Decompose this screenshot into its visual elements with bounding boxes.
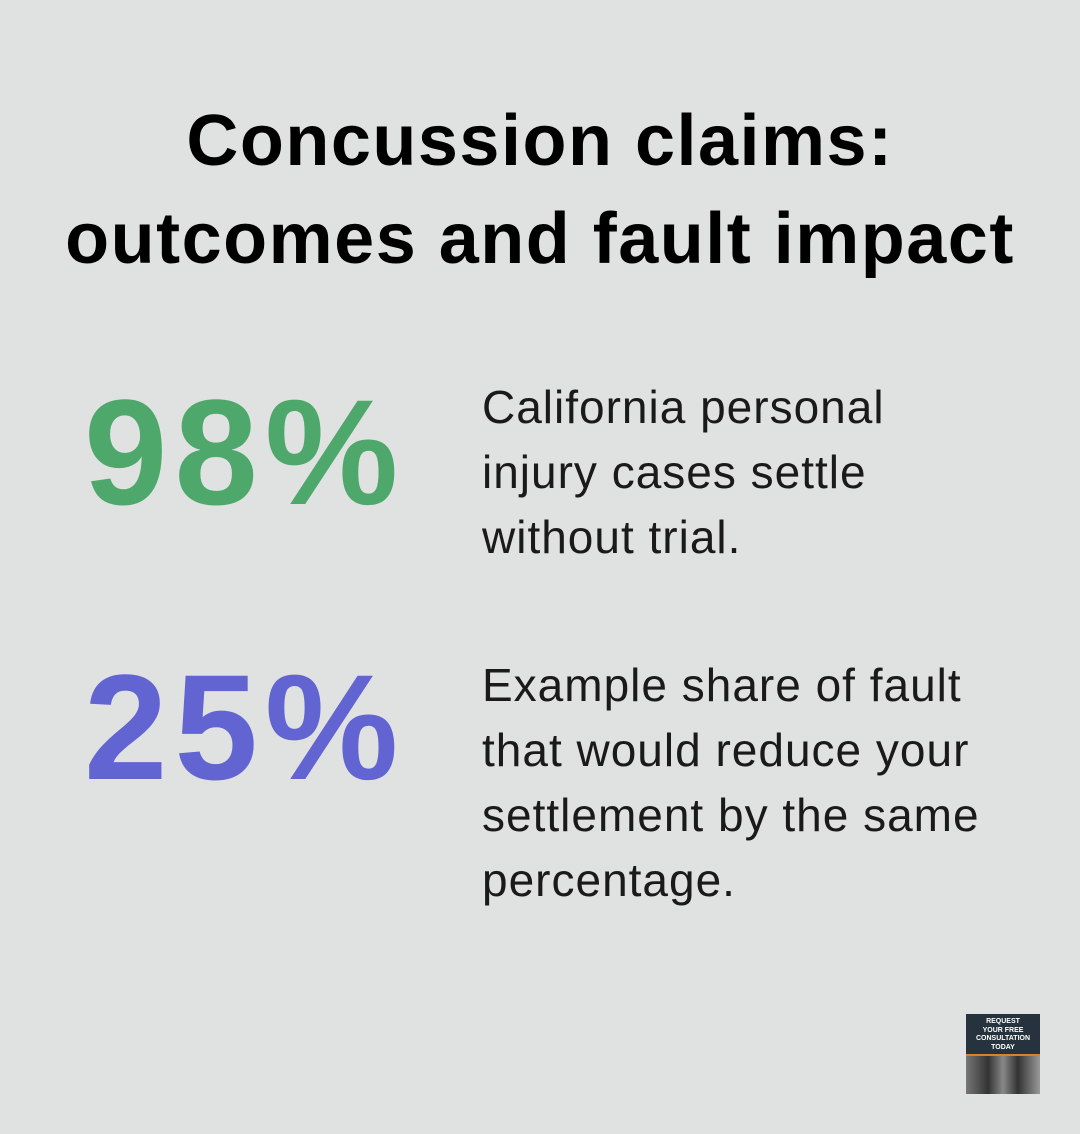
text: fault description: percentage. xyxy=(482,854,736,906)
text: fault description xyxy=(482,659,980,906)
logo: consultation badge: REQUEST xyxy=(986,1018,1020,1025)
stat: 25%: 25% xyxy=(84,643,405,811)
text: fault description: Example share of fault xyxy=(482,659,962,711)
text: settlement description: California personal xyxy=(482,381,885,433)
text: fault description: that would reduce your xyxy=(482,724,969,776)
title: outcomes and fault impact xyxy=(65,199,1015,279)
title xyxy=(65,101,1015,279)
logo: consultation badge: TODAY xyxy=(991,1044,1015,1050)
logo: consultation badge: CONSULTATION xyxy=(976,1035,1030,1042)
text: settlement description: without trial. xyxy=(482,511,741,563)
stat: 98%: 98% xyxy=(84,368,405,536)
title: Concussion claims: xyxy=(186,101,894,181)
text: fault description: settlement by the same xyxy=(482,789,980,841)
logo: consultation badge xyxy=(966,1014,1040,1094)
text: settlement description: injury cases settle xyxy=(482,446,867,498)
logo: consultation badge: YOUR FREE xyxy=(983,1026,1023,1034)
text: settlement description xyxy=(482,381,885,563)
